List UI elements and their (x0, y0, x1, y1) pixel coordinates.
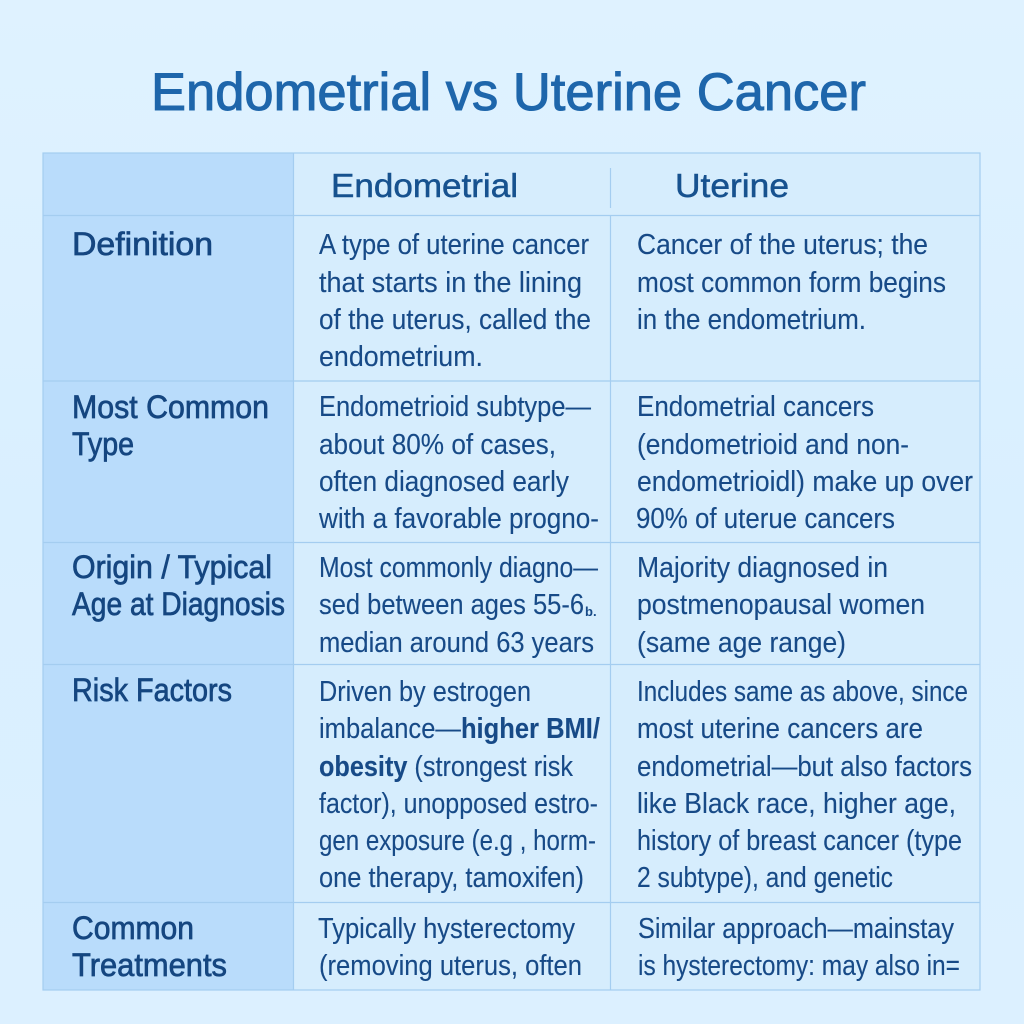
text block: Uterine risk factors: like Black race, higher age, (637, 788, 956, 820)
row heading: Common Treatments: Common (72, 910, 194, 946)
text block: Endometrial age at diagnosis: Most commonly diagno— (319, 552, 598, 584)
text block: Endometrial risk factors: imbalance—higher BMI/ (319, 713, 600, 745)
text block: Endometrial most common type: Endometrioid subtype— (319, 391, 591, 423)
row heading: Common Treatments (72, 910, 227, 983)
text block: Endometrial most common type: with a favorable progno- (318, 503, 599, 535)
text block: Uterine risk factors: most uterine cancers are (637, 713, 923, 745)
text block: Uterine most common type (636, 391, 973, 535)
text block: Endometrial treatments: (removing uterus, often (319, 950, 582, 982)
text block: Uterine treatments (638, 913, 960, 982)
text block: Uterine most common type: endometrioidl) make up over (637, 466, 973, 498)
text block: Endometrial definition: of the uterus, called the (319, 304, 591, 336)
text block: Uterine risk factors: Includes same as above, since (637, 676, 968, 708)
text block: Endometrial risk factors: one therapy, tamoxifen) (319, 862, 584, 894)
text block: Endometrial risk factors: gen exposure (e.g , horm- (319, 825, 596, 857)
row heading: Risk Factors: Risk Factors (72, 672, 232, 708)
text block: Uterine age at diagnosis: (same age range) (637, 627, 846, 659)
text block: Uterine treatments: Similar approach—mainstay (638, 913, 954, 945)
text block: Endometrial age at diagnosis: median around 63 years (319, 627, 594, 659)
text block: Uterine risk factors: 2 subtype), and genetic (637, 862, 893, 894)
text block: Endometrial age at diagnosis: sed between ages 55-6 (319, 589, 584, 621)
column heading: Uterine: Uterine (675, 167, 789, 204)
row heading: Origin / Typical Age at Diagnosis (72, 549, 285, 622)
text block: Uterine definition: Cancer of the uterus; the (637, 229, 928, 261)
text block: Uterine definition (637, 229, 946, 336)
text block: Uterine most common type: Endometrial cancers (637, 391, 874, 423)
text block: Endometrial risk factors: factor), unopposed estro- (319, 788, 598, 820)
text block: Endometrial most common type: often diagnosed early (319, 466, 569, 498)
text block: Uterine age at diagnosis: postmenopausal women (637, 589, 925, 621)
row heading: Most Common Type: Type (72, 426, 134, 462)
panel: row label column (43, 153, 293, 990)
text block: Uterine definition: in the endometrium. (637, 304, 866, 336)
text block: Endometrial risk factors (319, 676, 600, 894)
column heading: Endometrial: Endometrial (331, 167, 518, 204)
text block: Uterine risk factors (637, 676, 972, 894)
text block: Uterine treatments: is hysterectomy: may also in= (638, 950, 960, 982)
title: Endometrial vs Uterine Cancer (151, 63, 866, 122)
text block: Uterine most common type: (endometrioid and non- (637, 429, 909, 461)
text block: Endometrial definition: endometrium. (319, 341, 483, 373)
text block: Endometrial treatments (318, 913, 582, 982)
text block: Uterine age at diagnosis: Majority diagnosed in (637, 552, 888, 584)
text block: Endometrial definition: that starts in the lining (319, 267, 582, 299)
text block: Endometrial most common type: about 80% of cases, (319, 429, 556, 461)
text block: Uterine definition: most common form begins (637, 267, 946, 299)
text block: Uterine most common type: 90% of uterue cancers (636, 503, 895, 535)
text block: Endometrial treatments: Typically hysterectomy (318, 913, 575, 945)
panel: comparison table (43, 153, 980, 990)
text block: Uterine age at diagnosis (637, 552, 925, 659)
text block: Endometrial definition: A type of uterine cancer (319, 229, 589, 261)
row heading: Definition: Definition (72, 226, 213, 262)
row heading: Most Common Type: Most Common (72, 389, 269, 425)
text block: Uterine risk factors: history of breast cancer (type (637, 825, 962, 857)
row heading: Common Treatments: Treatments (72, 947, 227, 983)
row heading: Origin / Typical Age at Diagnosis: Age at Diagnosis (72, 586, 285, 622)
text block: Endometrial definition (319, 229, 591, 373)
text block: Endometrial most common type (318, 391, 599, 535)
text block: Endometrial age at diagnosis: b. (585, 604, 597, 619)
text block: Endometrial age at diagnosis (319, 552, 598, 659)
text block: Endometrial risk factors: Driven by estrogen (319, 676, 531, 708)
text block: Uterine risk factors: endometrial—but also factors (637, 751, 972, 783)
text block: Endometrial risk factors: obesity (strongest risk (319, 751, 573, 783)
row heading: Most Common Type (72, 389, 269, 462)
row heading: Origin / Typical Age at Diagnosis: Origin / Typical (72, 549, 272, 585)
